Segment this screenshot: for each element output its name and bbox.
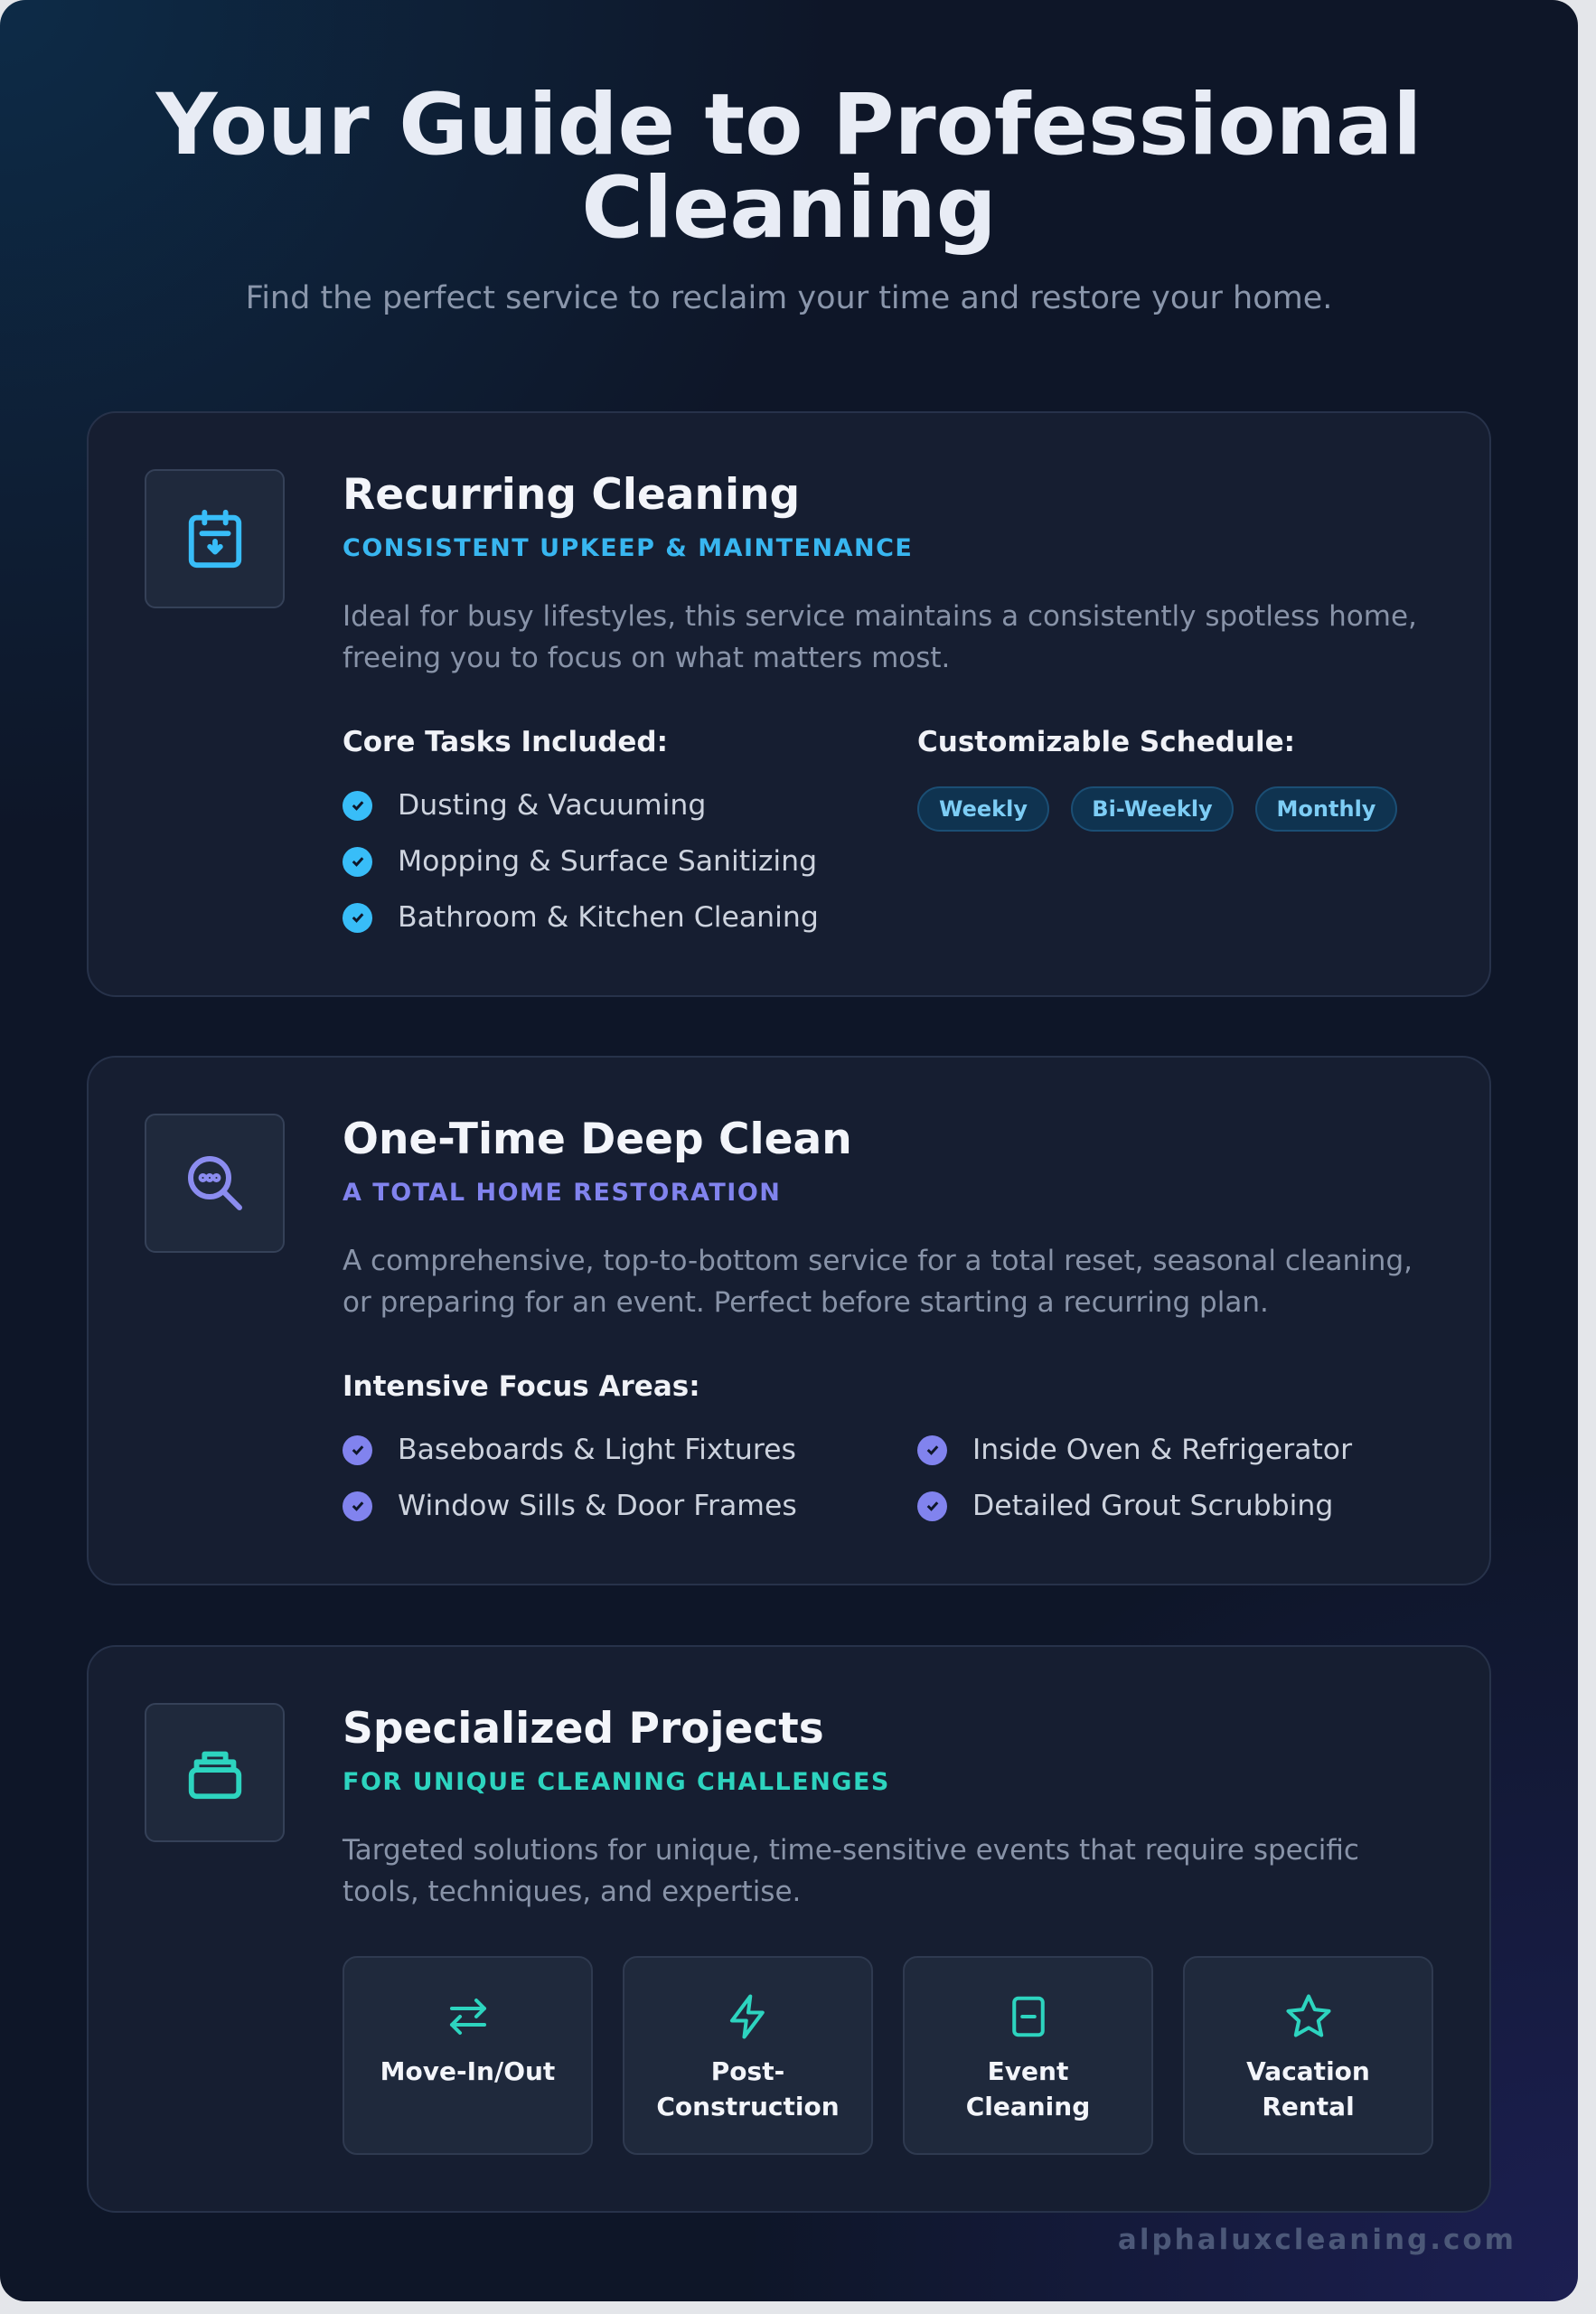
- tile: move-in/out: [343, 1956, 593, 2155]
- tile: event cleaning: [903, 1956, 1153, 2155]
- tile: vacation rental: Vacation: [1246, 2056, 1370, 2086]
- subheading: CONSISTENT UPKEEP & MAINTENANCE: [343, 534, 913, 562]
- tile: post-construction: Post-: [711, 2056, 784, 2086]
- tile: post-construction: Construction: [656, 2092, 840, 2121]
- title: [155, 76, 1422, 258]
- tile: event cleaning: Event: [988, 2056, 1068, 2086]
- icon: magnifier: [145, 1114, 285, 1253]
- list item: Detailed Grout Scrubbing: [972, 1490, 1333, 1522]
- pill: bi-weekly: Bi-Weekly: [1092, 796, 1213, 822]
- list heading: core tasks: Core Tasks Included:: [343, 726, 668, 758]
- heading: Specialized Projects: [343, 1704, 824, 1754]
- title: Your Guide to Professional: [156, 76, 1422, 174]
- list heading: Intensive Focus Areas:: [343, 1370, 700, 1403]
- subheading: A TOTAL HOME RESTORATION: [343, 1179, 781, 1207]
- pill: bi-weekly: [1071, 786, 1234, 832]
- tile: move-in/out: Move-In/Out: [380, 2056, 555, 2086]
- list item: Window Sills & Door Frames: [398, 1490, 797, 1522]
- pill: weekly: Weekly: [939, 796, 1028, 822]
- pill: weekly: [917, 786, 1049, 832]
- list item: Bathroom & Kitchen Cleaning: [398, 901, 819, 934]
- tile: vacation rental: [1183, 1956, 1433, 2155]
- pill: monthly: [1255, 786, 1397, 832]
- footer url: alphaluxcleaning.com: [1118, 2224, 1516, 2256]
- subheading: FOR UNIQUE CLEANING CHALLENGES: [343, 1768, 890, 1796]
- tile: post-construction: [623, 1956, 873, 2155]
- panel: specialized projects: [87, 1645, 1491, 2213]
- title: Cleaning: [581, 159, 997, 258]
- pill: monthly: Monthly: [1277, 796, 1375, 822]
- list item: Dusting & Vacuuming: [398, 789, 706, 822]
- description: A comprehensive, top-to-bottom service for a total reset, seasonal cleaning, or preparing for an event. Perfect before starting a recurring plan.: [343, 1245, 1413, 1319]
- heading: One-Time Deep Clean: [343, 1115, 852, 1164]
- description: Ideal for busy lifestyles, this service maintains a consistently spotless home, freeing you to focus on what matters most.: [343, 600, 1417, 674]
- icon: stack: [145, 1703, 285, 1842]
- subtitle: Find the perfect service to reclaim your time and restore your home.: [246, 280, 1332, 316]
- panel: deep clean: [87, 1056, 1491, 1585]
- description: Targeted solutions for unique, time-sensitive events that require specific tools, techniques, and expertise.: [343, 1834, 1359, 1908]
- list item: Inside Oven & Refrigerator: [972, 1434, 1352, 1466]
- tile: event cleaning: Cleaning: [966, 2092, 1090, 2121]
- list item: Mopping & Surface Sanitizing: [398, 845, 817, 878]
- list item: Baseboards & Light Fixtures: [398, 1434, 796, 1466]
- icon: calendar: [145, 469, 285, 608]
- panel: recurring cleaning: [87, 411, 1491, 997]
- list heading: schedule: Customizable Schedule:: [917, 726, 1295, 758]
- heading: Recurring Cleaning: [343, 470, 800, 520]
- tile: vacation rental: Rental: [1262, 2092, 1355, 2121]
